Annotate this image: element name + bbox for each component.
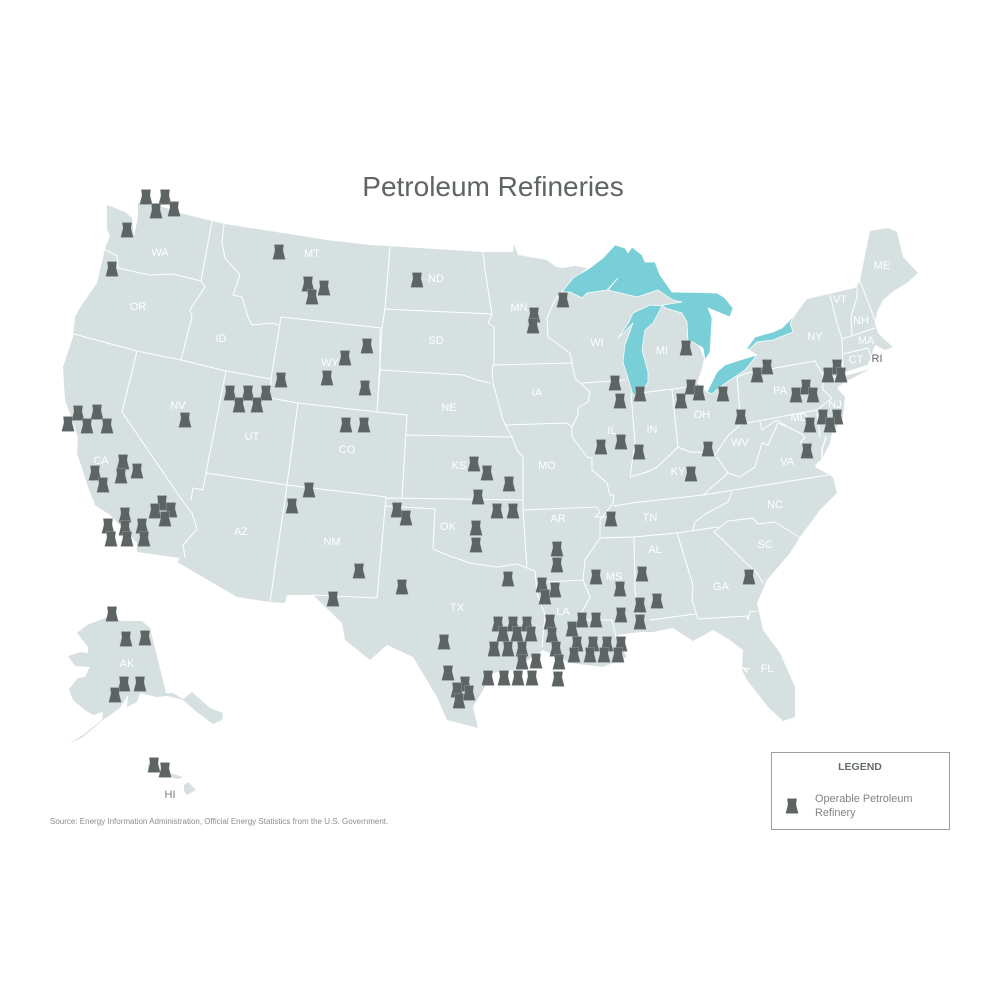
state labels: TN: [643, 512, 657, 524]
state labels: OR: [130, 301, 146, 313]
state labels: MO: [538, 460, 556, 472]
state labels: MD: [790, 412, 808, 424]
state labels: NM: [323, 536, 341, 548]
state labels: SD: [428, 335, 444, 347]
lakes superior and huron: [562, 245, 733, 360]
icons: refineries in the northwest and mountain states: [106, 190, 373, 606]
state labels: WV: [731, 437, 750, 449]
state labels: AL: [648, 544, 662, 556]
state labels: AZ: [234, 526, 248, 538]
state labels: SC: [757, 539, 773, 551]
map: chesapeake bay: [743, 437, 826, 672]
title: Petroleum Refineries: [362, 171, 624, 202]
state labels: [93, 247, 890, 675]
state labels: MN: [510, 302, 528, 314]
state labels: CA: [93, 455, 109, 467]
source note: Source: Energy Information Administration, Official Energy Statistics from the U.S. Government.: [50, 817, 388, 826]
lake ontario: [747, 315, 795, 350]
legend text: Refinery: [815, 807, 856, 819]
state labels: FL: [761, 663, 773, 675]
legend heading: LEGEND: [838, 761, 882, 773]
state labels: WI: [590, 337, 604, 349]
state labels: OH: [694, 409, 710, 421]
icons: refineries in alaska and hawaii: [106, 606, 171, 778]
state labels: CO: [339, 444, 356, 456]
lake michigan: [618, 305, 662, 395]
icons: refineries in the midwest and plains: [391, 272, 747, 552]
state labels: WY: [321, 357, 340, 369]
map: alaska: [68, 618, 223, 744]
state labels: MI: [656, 345, 668, 357]
state labels: ID: [216, 333, 227, 345]
great lakes: [562, 245, 795, 395]
state labels: ME: [874, 260, 890, 272]
legend box: [772, 752, 950, 830]
state labels: PA: [773, 385, 788, 397]
state labels: AR: [550, 513, 566, 525]
state labels: KY: [671, 466, 686, 478]
legend icon: [786, 798, 798, 814]
icons: refineries in the northeast: [751, 360, 847, 458]
state labels: LA: [556, 606, 570, 618]
state labels: NJ: [828, 399, 842, 411]
state labels: IN: [646, 424, 658, 436]
map: hawaii: [148, 762, 196, 795]
label: RI: RI: [872, 353, 882, 365]
state labels: UT: [245, 431, 260, 443]
map: state borders: [74, 221, 876, 672]
label: HI: HI: [164, 789, 176, 801]
legend text: Operable Petroleum: [815, 793, 912, 805]
lake erie: [707, 355, 757, 394]
state labels: NH: [853, 315, 869, 327]
icons: refineries along the gulf and south: [396, 542, 755, 708]
state labels: KS: [452, 460, 466, 472]
state labels: GA: [713, 581, 730, 593]
state labels: MA: [858, 335, 875, 347]
map: contiguous United States land: [63, 203, 918, 728]
state labels: VT: [833, 294, 847, 306]
state labels: ND: [428, 273, 444, 285]
state labels: TX: [450, 602, 465, 614]
state labels: NE: [441, 402, 457, 414]
state labels: WA: [151, 247, 169, 259]
state labels: IA: [532, 387, 543, 399]
state labels: NV: [170, 400, 186, 412]
state labels: AK: [120, 658, 135, 670]
state labels: NY: [807, 331, 823, 343]
state labels: VA: [780, 456, 795, 468]
state labels: CT: [849, 354, 864, 366]
state labels: NC: [767, 499, 783, 511]
state labels: MS: [606, 571, 622, 583]
state labels: IL: [607, 425, 617, 437]
state labels: OK: [440, 521, 457, 533]
icons: refineries in california: [62, 404, 177, 546]
state labels: MT: [304, 248, 320, 260]
legend: [772, 752, 950, 830]
